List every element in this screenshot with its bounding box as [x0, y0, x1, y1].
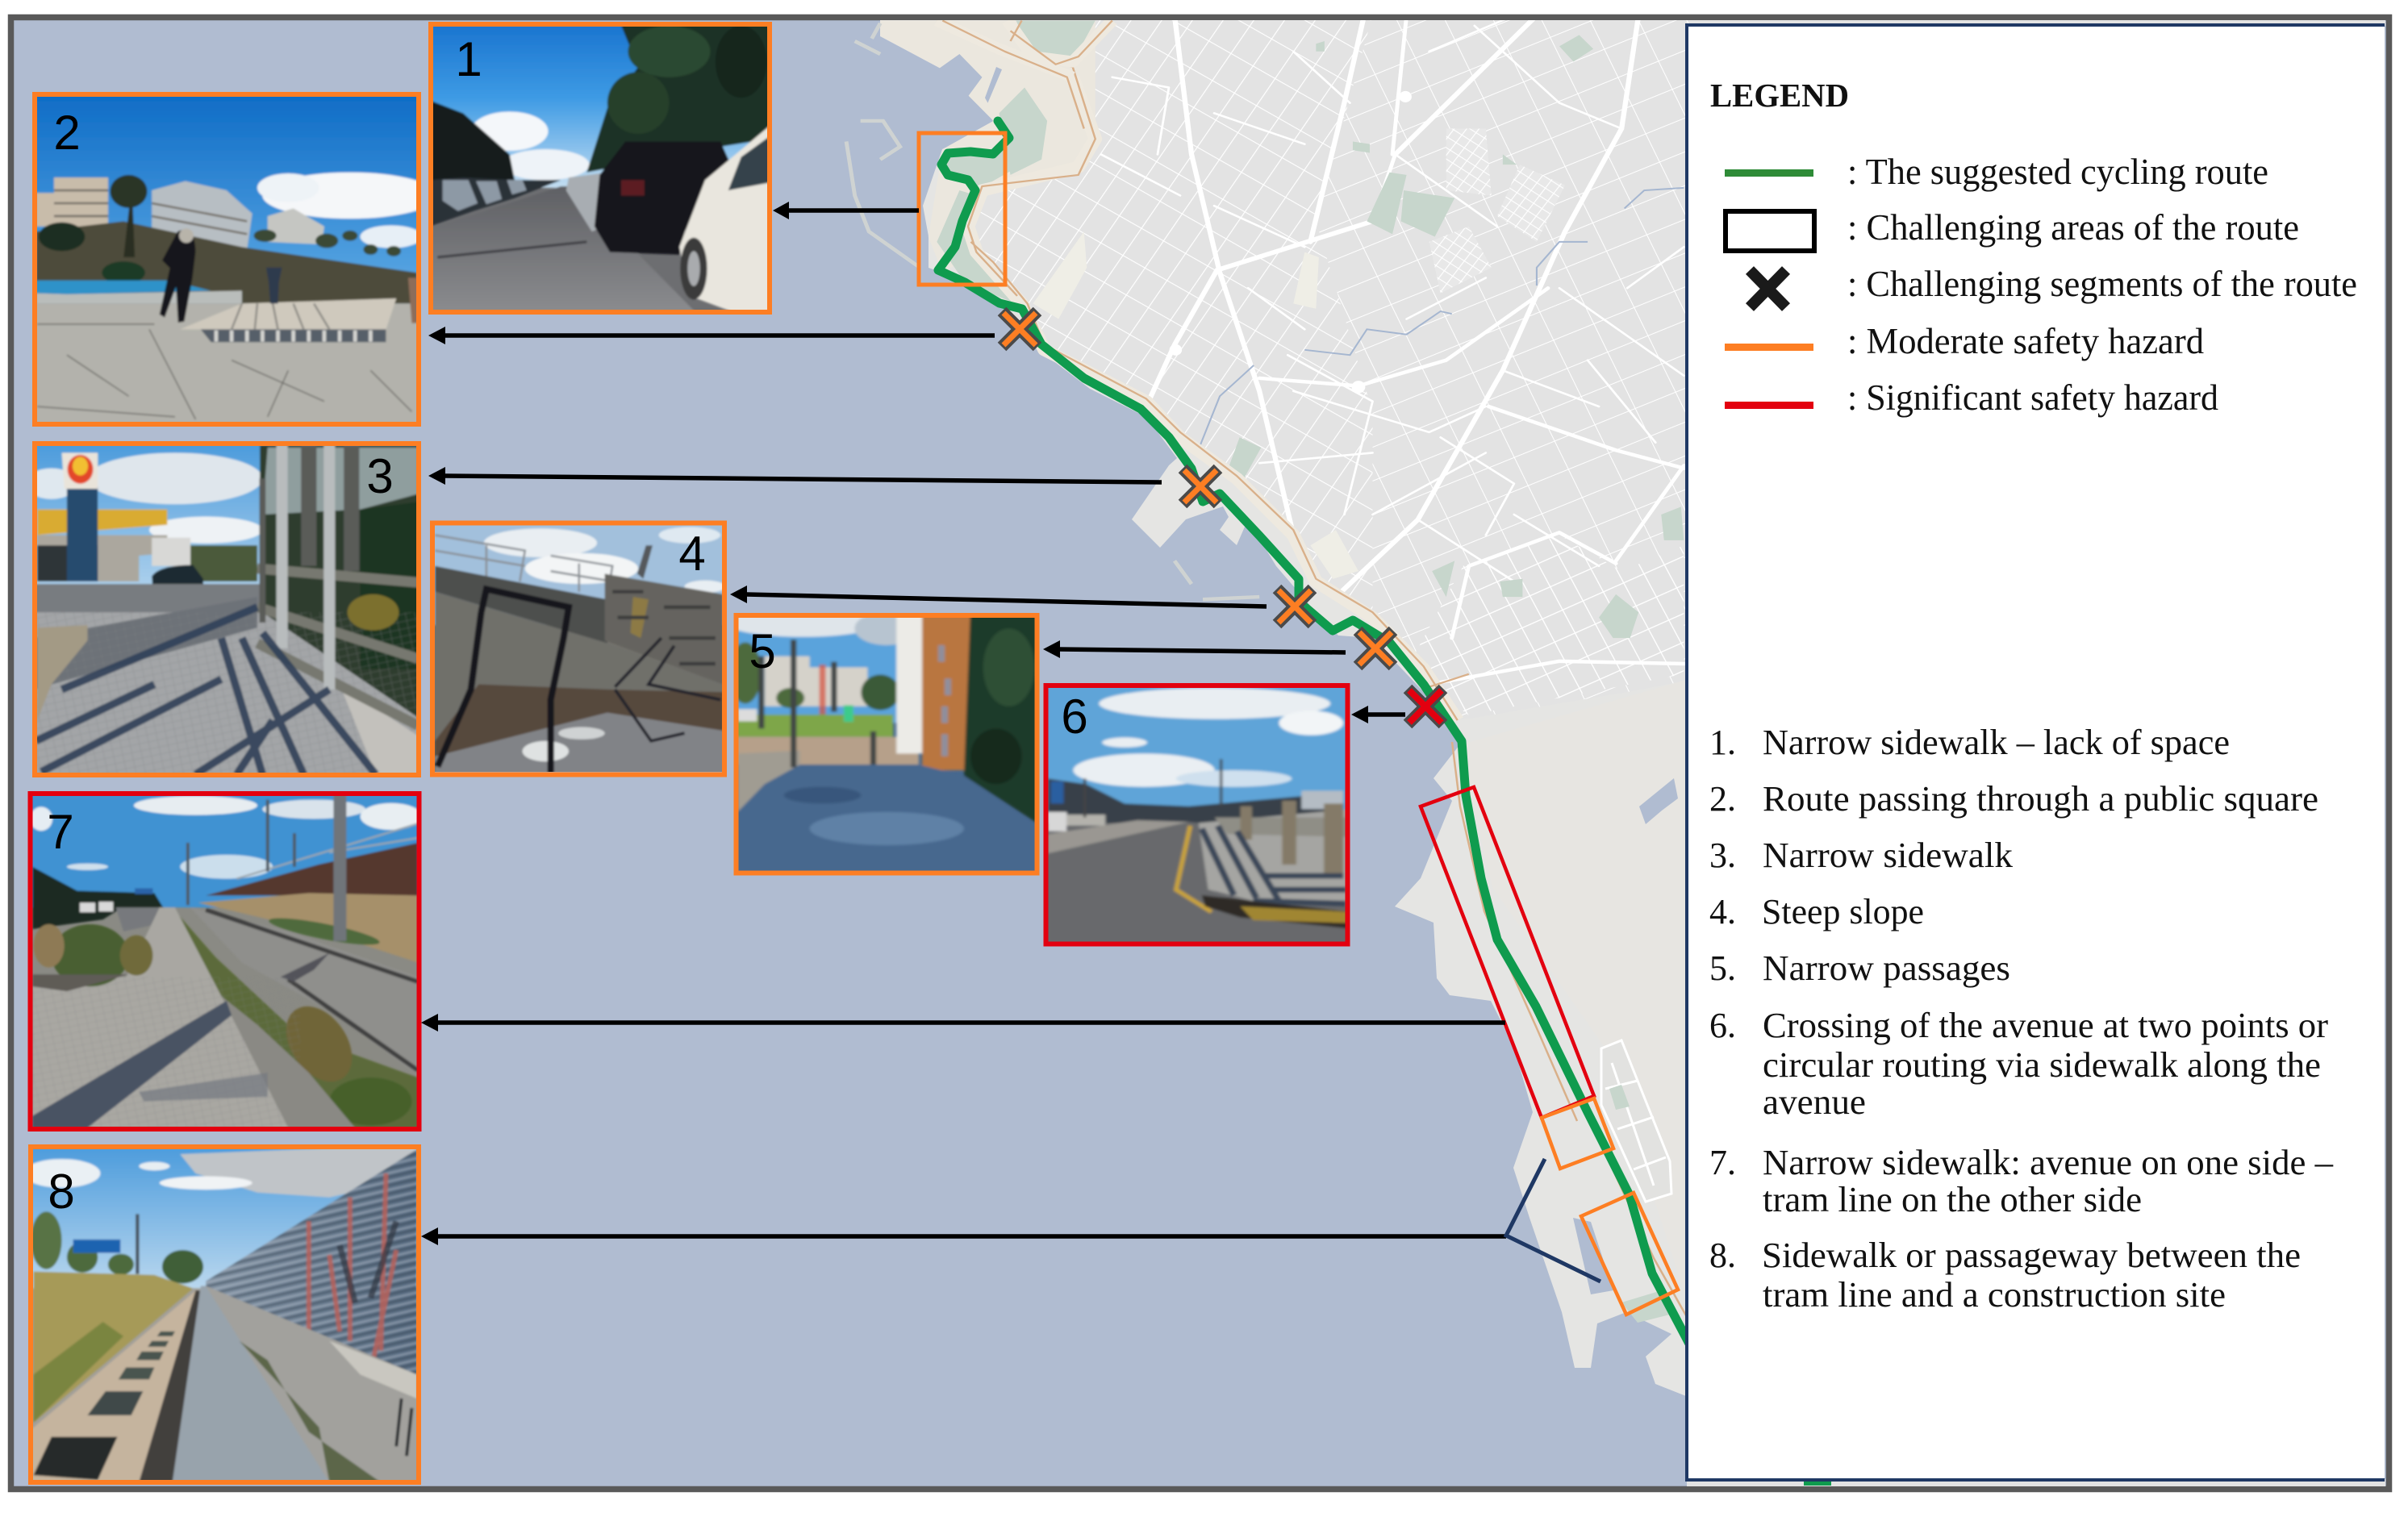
segment markers [1002, 311, 1443, 724]
area 7 box [1421, 787, 1594, 1118]
parks [937, 21, 1684, 638]
numbered list of hazards: 6. [1709, 1006, 1736, 1045]
arrow 8 [421, 1159, 1600, 1282]
number 8: 8 [48, 1165, 75, 1219]
map slivers above and below the legend [1687, 20, 2385, 1486]
numbered list of hazards: Narrow sidewalk – lack of space [1763, 723, 2230, 762]
arrow 2 [428, 327, 995, 344]
number 4: 4 [678, 527, 706, 581]
southern land details [1452, 677, 1831, 1482]
area 1 box [919, 133, 1005, 285]
arrow 7 [421, 1014, 1505, 1031]
numbered list of hazards: 5. [1709, 948, 1736, 988]
numbered list of hazards: Sidewalk or passageway between the [1762, 1236, 2301, 1275]
number 6: 6 [1061, 690, 1088, 744]
harbour water and breakwaters [934, 54, 1002, 103]
numbered list of hazards: 8. [1709, 1236, 1736, 1275]
arrow 4 [730, 586, 1267, 606]
numbered list of hazards: tram line and a construction site [1763, 1275, 2226, 1315]
arrow 3 [428, 467, 1162, 485]
photo 5 [726, 609, 1041, 873]
photo 2 [33, 93, 437, 427]
numbered list of hazards: 2. [1709, 779, 1736, 819]
cream zones [1033, 231, 1358, 579]
area 8 box upper [1542, 1098, 1613, 1169]
number 2: 2 [53, 106, 81, 160]
numbered list of hazards: 7. [1709, 1143, 1736, 1182]
marker 6 [1408, 689, 1443, 724]
marker 4 [1277, 589, 1313, 624]
numbered list of hazards: 3. [1709, 836, 1736, 875]
legend: moderate hazard: : Moderate safety hazard [1847, 321, 2204, 361]
numbered list of hazards: Narrow sidewalk: avenue on one side – [1763, 1143, 2334, 1182]
streams [1197, 188, 1684, 452]
map [846, 15, 2385, 1486]
legend: cycling route: : The suggested cycling route [1847, 152, 2268, 192]
marker 2 [1002, 311, 1037, 347]
photo 8 [23, 1144, 424, 1482]
number 5: 5 [749, 624, 776, 678]
arrows [421, 202, 1600, 1282]
legend: challenging segments: : Challenging segments of the route [1847, 264, 2357, 304]
area 8 box lower [1581, 1193, 1678, 1315]
numbered list of hazards: Route passing through a public square [1763, 779, 2318, 819]
photo 4 [432, 523, 726, 774]
number 1: 1 [455, 32, 482, 86]
numbered list of hazards: 4. [1709, 892, 1736, 931]
numbered list of hazards: Crossing of the avenue at two points or [1763, 1006, 2328, 1045]
number 3: 3 [366, 449, 394, 503]
legend: significant hazard: : Significant safety hazard [1847, 377, 2218, 418]
photo 7 [28, 793, 424, 1130]
marker 3 [1183, 469, 1218, 504]
arrow 6 [1351, 706, 1405, 723]
numbered list of hazards: Steep slope [1762, 892, 1924, 931]
photo 1 [430, 23, 772, 314]
cycling route [938, 121, 1690, 1345]
numbered list of hazards: Narrow passages [1763, 948, 2010, 988]
panel: legend [1687, 25, 2385, 1480]
marker 5 [1358, 631, 1393, 666]
coastal avenue [937, 21, 1469, 720]
arrow 5 [1043, 640, 1346, 658]
numbered list of hazards: circular routing via sidewalk along the [1763, 1045, 2321, 1085]
numbered list of hazards [1709, 723, 2334, 1315]
photo 6 [1041, 678, 1356, 945]
legend: challenging areas: : Challenging areas of the route [1847, 207, 2299, 248]
numbered list of hazards: 1. [1709, 723, 1736, 762]
numbered list of hazards: avenue [1763, 1082, 1866, 1122]
land mass [880, 20, 1694, 1399]
city street network [846, 15, 1701, 736]
numbered list of hazards: Narrow sidewalk [1763, 836, 2013, 875]
photo 3 [26, 443, 422, 775]
legend heading: LEGEND [1710, 77, 1849, 114]
number 7: 7 [47, 805, 74, 859]
arrow 1 [773, 202, 919, 219]
numbered list of hazards: tram line on the other side [1763, 1180, 2142, 1219]
